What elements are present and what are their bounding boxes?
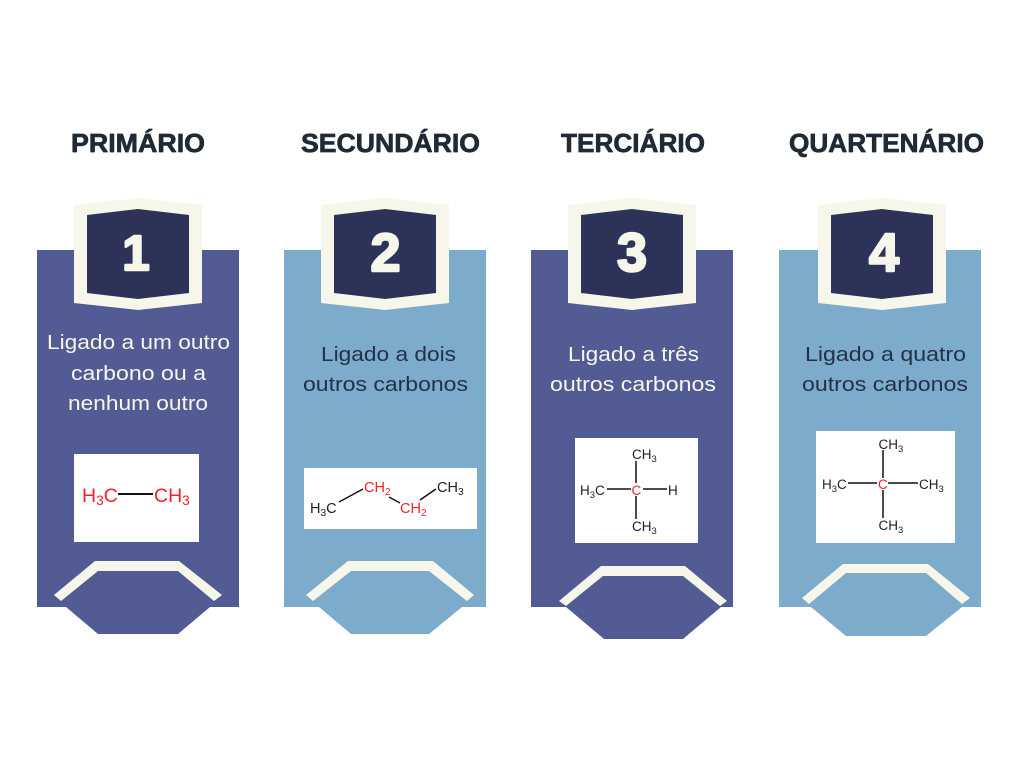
description: outros carbonos [303, 373, 468, 396]
molecule: butane: CH [400, 501, 421, 517]
molecule: butane: 2 [385, 487, 391, 498]
molecule: tertiary carbon: C [632, 483, 642, 498]
description: Ligado a quatro [805, 343, 966, 366]
molecule: tertiary carbon: CH [632, 447, 652, 462]
molecule: butane [304, 468, 477, 529]
bottom hexagon tab [66, 607, 210, 634]
description: nenhum outro [68, 392, 208, 415]
molecule: quaternary carbon: CH [878, 437, 898, 452]
description: Ligado a um outro [47, 331, 230, 354]
molecule: tertiary carbon: 3 [590, 490, 595, 501]
molecule: quaternary carbon: 3 [898, 444, 903, 455]
molecule: butane: 3 [458, 487, 464, 498]
description: outros carbonos [802, 373, 968, 396]
description: Ligado a dois [321, 343, 456, 366]
molecule: quaternary carbon: 3 [832, 484, 837, 495]
molecule: butane: CH [437, 480, 458, 496]
molecule: quaternary carbon: C [878, 477, 888, 492]
description: carbono ou a [71, 362, 207, 385]
molecule: butane: 2 [421, 508, 427, 519]
heading: terciário: TERCIÁRIO [561, 128, 705, 158]
molecule: quaternary carbon: 3 [938, 484, 944, 495]
molecule: tertiary carbon: H [668, 483, 678, 498]
panel: primário [37, 198, 239, 634]
panel: terciário [531, 198, 733, 639]
description: outros carbonos [550, 373, 716, 396]
description [303, 343, 468, 396]
molecule: quaternary carbon: H [822, 477, 832, 492]
bottom hexagon tab [319, 607, 462, 634]
number badge 2 [321, 198, 449, 310]
bottom hexagon tab [811, 607, 962, 636]
molecule: ethane: 3 [96, 493, 104, 508]
heading: quartenário: QUARTENÁRIO [789, 128, 984, 158]
description: Ligado a três [568, 343, 699, 366]
heading: primário: PRIMÁRIO [71, 128, 205, 158]
molecule: ethane: 3 [182, 493, 190, 508]
number badge 2: 2 [370, 223, 401, 283]
number badge 4: 4 [869, 223, 899, 283]
card background [37, 250, 239, 607]
molecule: quaternary carbon: 3 [898, 525, 903, 536]
molecule: butane: 3 [320, 508, 326, 519]
description [802, 343, 968, 396]
number badge 3 [568, 198, 696, 310]
panel: quartenário [779, 198, 981, 636]
bottom chevron [802, 564, 970, 604]
molecule: tertiary carbon: 3 [652, 526, 657, 537]
molecule: tertiary carbon: CH [632, 519, 652, 534]
card background [531, 250, 733, 607]
number badge 1: 1 [122, 227, 150, 281]
bottom chevron [559, 566, 727, 606]
molecule: tertiary carbon: C [595, 483, 605, 498]
card background [779, 250, 981, 607]
number badge 3: 3 [617, 223, 647, 283]
molecule: quaternary carbon: CH [878, 518, 898, 533]
molecule: tertiary carbon [575, 438, 698, 543]
panel: secundário [284, 198, 486, 634]
card background [284, 250, 486, 607]
molecule: ethane: C [104, 485, 118, 507]
description [47, 331, 230, 415]
bottom chevron [306, 561, 474, 601]
molecule: ethane [74, 454, 199, 542]
molecule: butane: H [310, 501, 320, 517]
molecule: butane: CH [364, 480, 385, 496]
heading: secundário: SECUNDÁRIO [301, 128, 480, 158]
molecule: quaternary carbon [816, 431, 955, 543]
molecule: tertiary carbon: 3 [652, 454, 657, 465]
molecule: butane: C [326, 501, 337, 517]
bottom chevron [54, 561, 222, 601]
bottom hexagon tab [566, 607, 721, 639]
number badge 1 [74, 198, 202, 310]
molecule: tertiary carbon: H [580, 483, 590, 498]
molecule: ethane: H [82, 485, 96, 507]
molecule: quaternary carbon: CH [919, 477, 938, 492]
number badge 4 [818, 198, 946, 310]
molecule: quaternary carbon: C [837, 477, 847, 492]
description [550, 343, 716, 396]
molecule: ethane: CH [154, 485, 182, 507]
